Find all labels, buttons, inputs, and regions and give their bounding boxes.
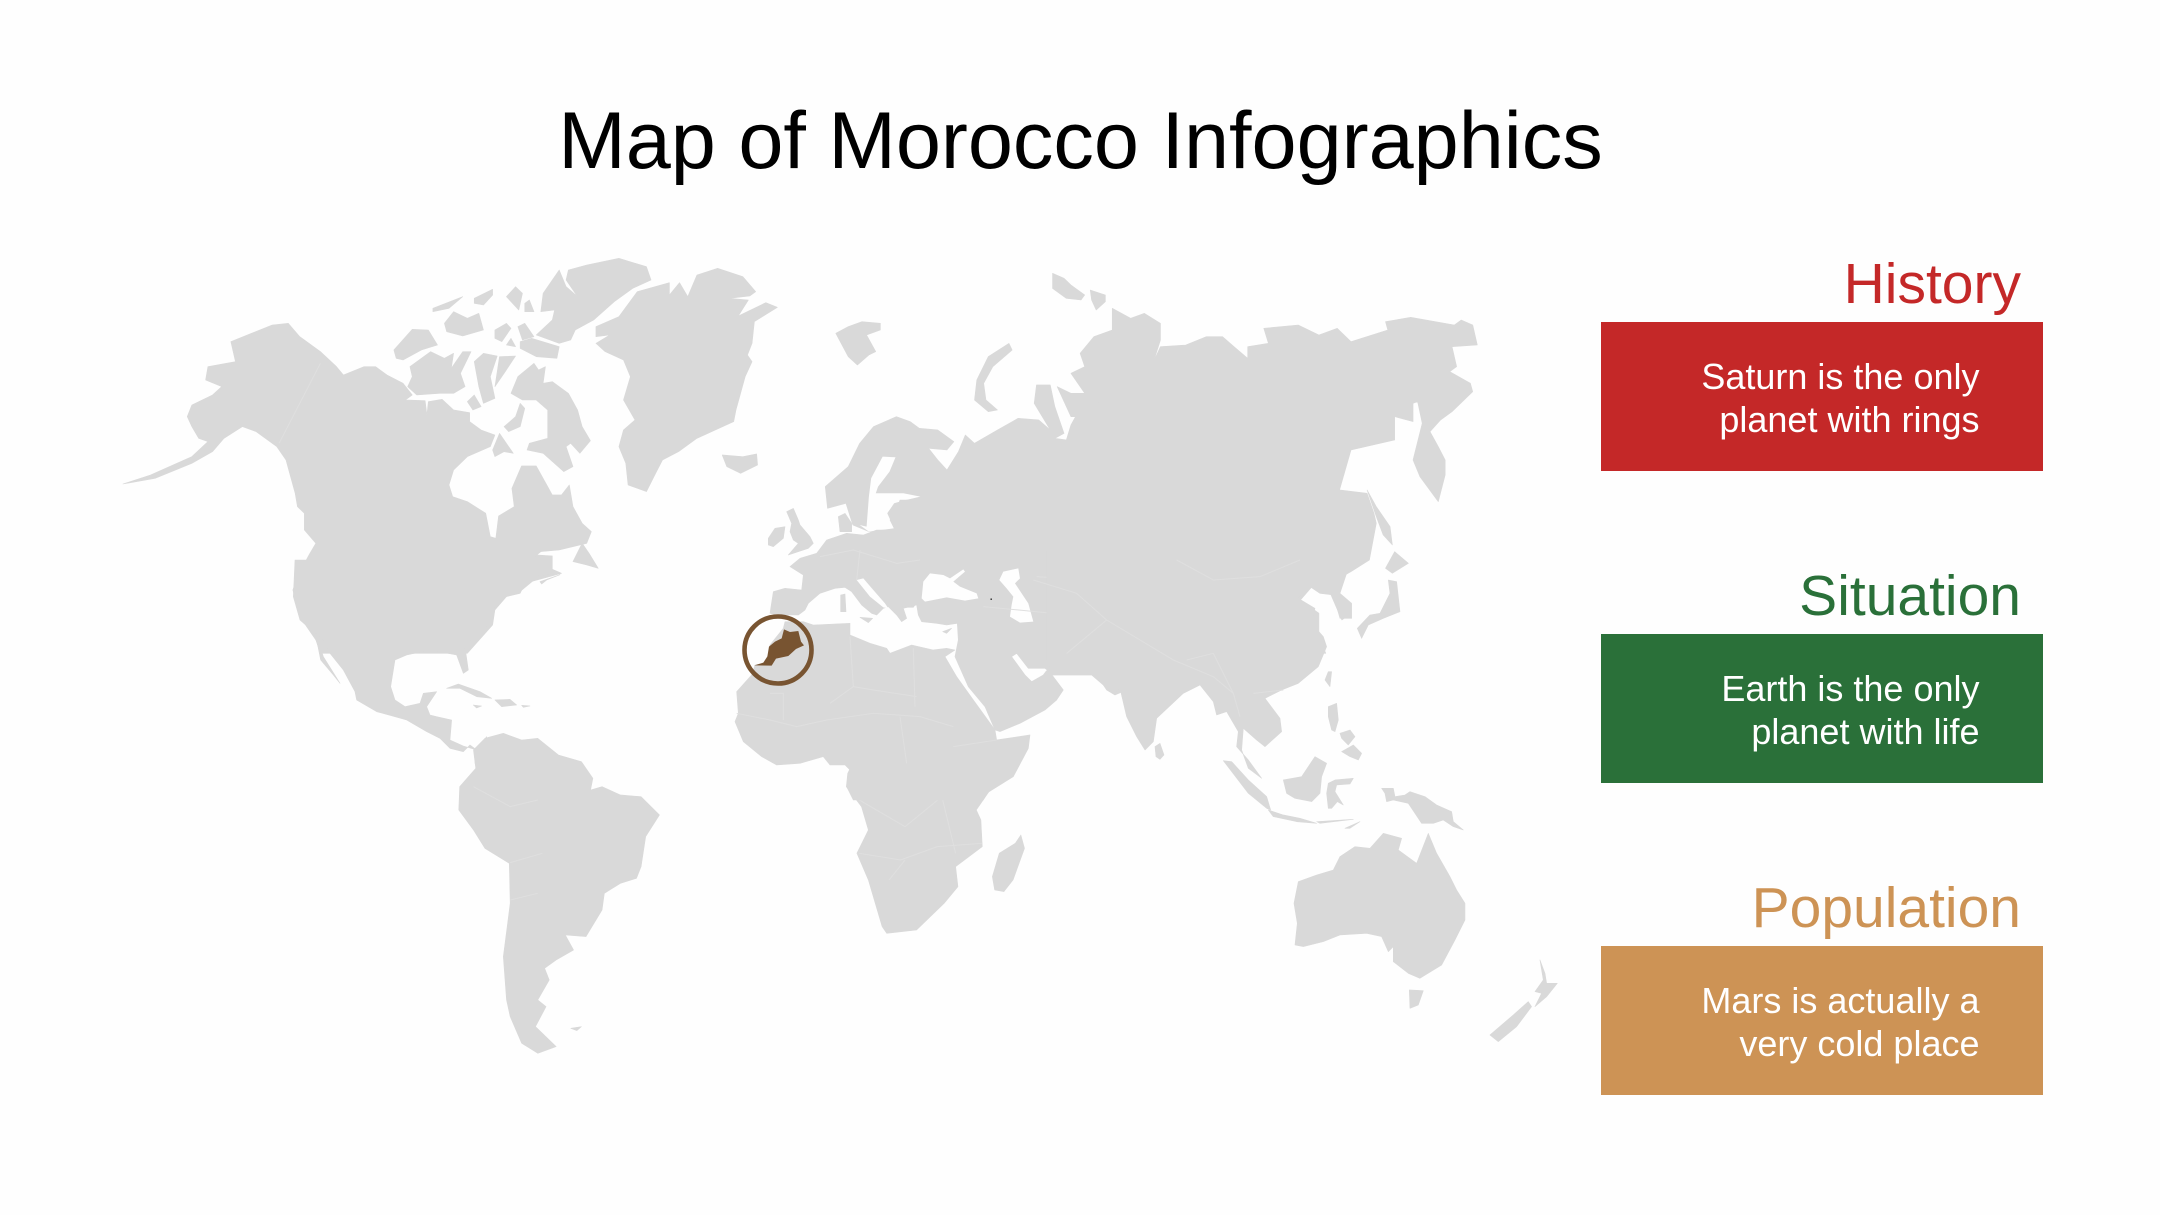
map: North America and Arctic	[123, 258, 777, 653]
heading: History: History	[1844, 252, 2021, 316]
box: History description: planet with rings	[1719, 399, 1980, 440]
box: Situation description: Earth is the only	[1721, 668, 1980, 709]
panel: History	[1601, 252, 2043, 471]
box: History description: Saturn is the only	[1701, 356, 1980, 397]
map: Europe, Middle East and northern Africa	[735, 500, 1127, 800]
map: Australia, New Guinea and New Zealand	[1294, 788, 1557, 1042]
box: Population description: very cold place	[1739, 1023, 1980, 1064]
map: South and East Asia	[1033, 550, 1400, 828]
box: Situation description	[1601, 634, 2043, 783]
map: South America, southern Africa and Madagascar	[459, 733, 1025, 1053]
title: Map of Morocco Infographics	[558, 96, 1603, 186]
box: Situation description: planet with life	[1751, 711, 1980, 752]
box: Population description	[1601, 946, 2043, 1095]
panel: Population	[1601, 876, 2043, 1095]
panel: Situation	[1601, 564, 2043, 783]
map: United States, Mexico and Central America	[293, 560, 560, 763]
box: History description	[1601, 322, 2043, 471]
box: Population description: Mars is actually a	[1701, 980, 1980, 1021]
map: Russia and Scandinavia	[825, 273, 1477, 653]
heading: Situation: Situation	[1799, 564, 2021, 628]
icon: Morocco location marker	[744, 616, 812, 684]
heading: Population: Population	[1752, 876, 2021, 940]
small black dot	[990, 598, 992, 600]
